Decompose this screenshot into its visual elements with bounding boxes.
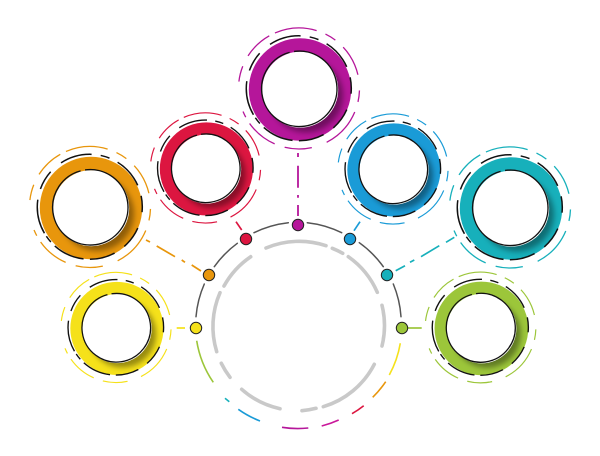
- ring: purple: [220, 9, 378, 168]
- node: purple: [292, 219, 304, 231]
- central thin ring: grey arcs between nodes: [196, 223, 401, 317]
- infographic: seven rings around a central circle: [29, 27, 572, 430]
- node: orange: [203, 269, 215, 281]
- central inner thick dashed grey ring: [213, 241, 384, 411]
- connector: teal: [396, 237, 454, 271]
- ring: orange: [11, 128, 169, 286]
- ring: green: [408, 255, 553, 400]
- ring: red: [133, 96, 278, 240]
- connector: yellow: [177, 327, 185, 329]
- connector: blue: [354, 222, 360, 231]
- node: teal: [381, 269, 393, 281]
- ring: blue: [321, 97, 465, 241]
- node: yellow: [190, 322, 202, 334]
- connector: green: [407, 327, 422, 329]
- connector: purple: [297, 153, 299, 216]
- ring: yellow: [44, 255, 188, 400]
- ring: teal: [431, 128, 589, 287]
- connector: red: [236, 222, 242, 230]
- connector: orange: [146, 240, 201, 271]
- node: blue: [344, 233, 356, 245]
- central lower coloured arc segments: [197, 341, 400, 429]
- node: red: [240, 233, 252, 245]
- node: green: [396, 322, 408, 334]
